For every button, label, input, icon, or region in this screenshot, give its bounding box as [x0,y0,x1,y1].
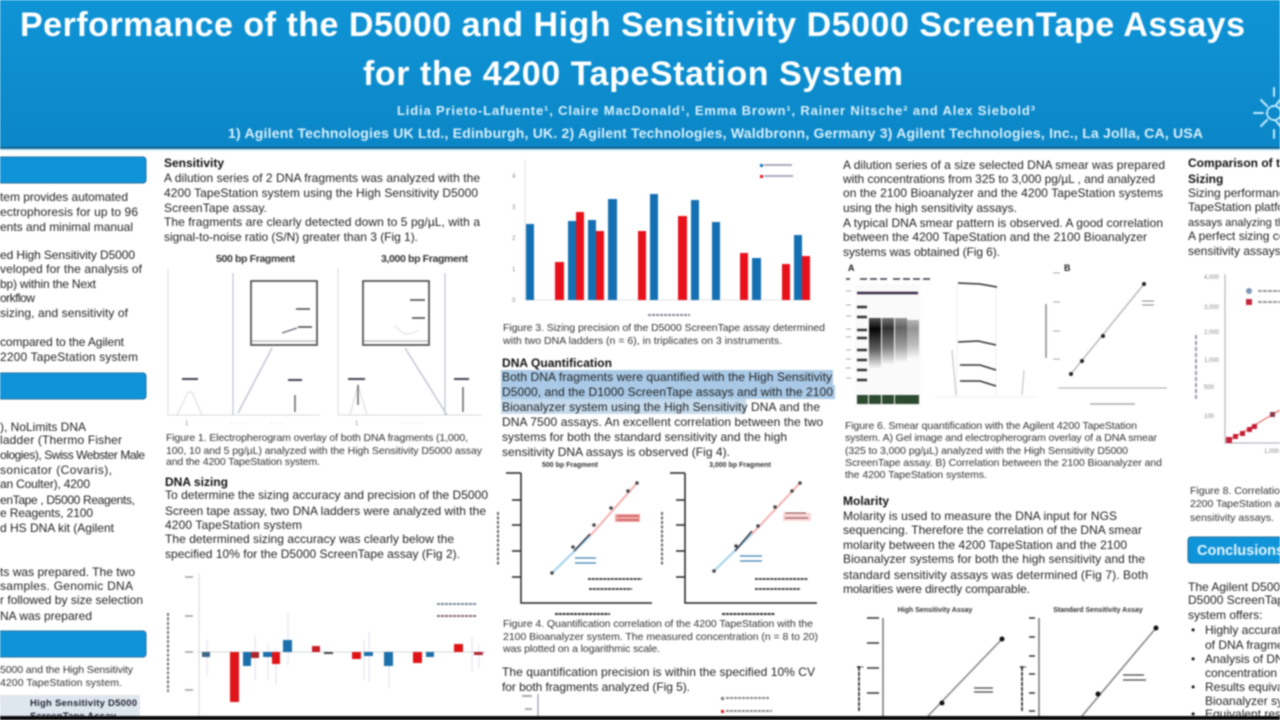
sensitivity text: A dilution series of 2 DNA fragments was analyzed with the [164,171,480,185]
figure 8: sizing correlation plot: 100 [1204,414,1215,420]
introduction text [0,190,143,364]
figure 1: electropherograms: 1 [355,421,359,427]
figure 4: correlation plots: 3,000 bp Fragment [709,462,772,469]
axis label [648,314,690,316]
figure 4: correlation plots [498,462,817,614]
figure 1: electropherograms: 1 [185,421,189,427]
figure 6 caption: system. A) Gel image and electropherogram overlay of a DNA smear [845,432,1158,444]
figure 4 caption: 2100 Bioanalyzer system. The measured concentration (n = 8 to 20) [503,631,818,643]
sensitivity text: ScreenTape assay. [164,201,267,215]
figure 8: sizing correlation plot: 500 [1204,385,1215,391]
figure 1 caption: and the 4200 TapeStation system. [166,456,320,468]
introduction text: bp) within the Next [0,277,97,291]
figure 6A: gel image: A [848,263,855,273]
figure 4 caption [502,618,818,655]
figure 3 caption: Figure 3. Sizing precision of the D5000 ScreenTape assay determined [503,322,825,334]
results intro text: 5000 and the High Sensitivity [0,664,134,676]
figure 8: sizing correlation plot: 4,000 [1204,275,1220,281]
molarity text: standard sensitivity assays was determined (Fig 7). Both [843,568,1148,582]
panel: introduction heading [0,157,146,183]
methods text: enTape , D5000 Reagents, [0,493,135,507]
bottom edge bar [0,716,1280,720]
molarity text: sequencing. Therefore the correlation of the DNA smear [843,523,1142,537]
conclusions text [1188,580,1280,720]
figure 7: molarity plots [857,607,1158,720]
heading: DNA Quantification: DNA Quantification [502,356,612,370]
figure 1 caption [166,432,483,468]
figure 8 caption: sensitivity assays. [1190,512,1274,524]
title [20,6,1245,93]
panel: methods heading [0,373,146,399]
figure 6 caption: ScreenTape assay. B) Correlation between the 2100 Bioanalyzer and [845,457,1162,469]
figure 3: sizing precision bar chart: 1 [512,267,516,273]
results intro text [0,664,134,689]
figure 3: sizing precision bar chart: 0 [512,298,516,304]
smear text: with concentrations from 325 to 3,000 pg/µL , and analyzed [842,172,1155,186]
figure 1: electropherograms: · · · · · · · [400,421,424,427]
column 2: sensitivity and sizing [164,156,488,716]
figure 3 caption: with two DNA ladders (n = 6), in triplicates on 3 instruments. [502,335,782,347]
figure 6B: correlation plot [1046,263,1167,404]
figure 1: electropherograms: · · · · [270,421,283,427]
smear text: on the 2100 Bioanalyzer and the 4200 TapeStation systems [843,186,1163,200]
sensitivity text: signal-to-noise ratio (S/N) greater than 3 (Fig 1). [164,230,418,244]
figure 6A: electropherogram overlay [935,283,1036,397]
introduction text: 2200 TapeStation system [0,350,138,364]
figure 6B: correlation plot: B [1064,263,1071,273]
figure 6A: gel image [846,263,932,406]
comparison text [1188,186,1280,258]
smear text: A typical DNA smear pattern is observed. A good correlation [843,216,1163,230]
methods text: samples. Genomic DNA [0,579,133,593]
panel: conclusions heading [1188,537,1280,563]
precision text: The quantification precision is within the specified 10% CV [502,665,815,679]
figure 6 caption: (325 to 3,000 pg/µL) analyzed with the High Sensitivity D5000 [845,445,1128,457]
DNA sizing text: To determine the sizing accuracy and precision of the D5000 [165,488,488,502]
quantification text: Bioanalyzer system using the High Sensitivity DNA and the [502,400,820,414]
methods text: d HS DNA kit (Agilent [0,521,115,535]
quantification text: D5000, and the D1000 ScreenTape assays and with the 2100 [502,385,833,399]
column 5: comparison and conclusions [1188,156,1280,720]
figure 8: sizing correlation plot: 1,000 [1204,358,1220,364]
figure 8: sizing correlation plot: 3,000 [1204,305,1220,311]
quantification text: sensitivity DNA assays is observed (Fig 4). [502,445,730,459]
table header [0,695,140,720]
heading: Sensitivity: Sensitivity [164,156,224,170]
DNA sizing text: Screen tape assay, two DNA ladders were analyzed with the [165,504,486,518]
DNA sizing text [165,488,488,561]
introduction text: compared to the Agilent [0,335,125,349]
introduction text: ed High Sensitivity D5000 [0,248,135,262]
figure 6 caption: Figure 6. Smear quantification with the Agilent 4200 TapeStation [845,420,1137,432]
methods text: e Reagents, 2100 [0,506,93,520]
legend [1246,288,1280,305]
title: Performance of the D5000 and High Sensitivity D5000 ScreenTape Assays [20,6,1245,44]
icon: Agilent spark logo [1254,88,1280,138]
title: for the 4200 TapeStation System [363,55,903,93]
results intro text: 4200 TapeStation system. [0,677,122,689]
molarity text: Bioanalyzer systems for both the high sensitivity and the [843,552,1145,566]
figure 8: sizing correlation plot: 1,000 [1264,449,1280,455]
quantification text: DNA 7500 assays. An excellent correlation between the two [502,415,823,429]
heading: comparison of sizing [1188,156,1280,186]
methods text: ladder (Thermo Fisher [0,433,122,447]
text selection highlight [501,370,835,414]
conclusions text: • [1191,680,1195,694]
methods text: sonicator (Covaris), [0,463,112,477]
column 4: smear and molarity [842,158,1167,720]
methods text: r followed by size selection [0,593,143,607]
methods text: ts was prepared. The two [0,565,135,579]
methods text: NA was prepared [0,609,92,623]
smear text: systems was obtained (Fig 6). [843,245,1000,259]
sensitivity text [164,171,480,244]
quantification text: Both DNA fragments were quantified with the High Sensitivity [502,370,832,384]
figure 7: molarity plots: High Sensitivity Assay [898,607,973,614]
figure 3 caption [502,322,825,347]
molarity text: Molarity is used to measure the DNA input for NGS [843,509,1117,523]
conclusions text: • [1191,623,1195,637]
methods text [0,420,145,623]
smear text [842,158,1165,259]
heading: DNA sizing: DNA sizing [165,475,228,489]
figure 4 caption: was plotted on a logarithmic scale. [502,643,660,655]
figure 5: precision chart (cropped) [522,694,772,720]
quantification text [502,370,833,459]
column 1: introduction and methods [0,157,146,720]
precision text [502,665,815,694]
header banner [0,0,1280,151]
molarity text: molarity between the 4200 TapeStation and the 2100 [843,538,1127,552]
table header: High Sensitivity D5000 [30,698,137,709]
introduction text: sizing, and sensitivity of [0,306,129,320]
methods text: an Coulter), 4200 [0,477,90,491]
column 3: precision and quantification [498,160,835,720]
smear text: A dilution series of a size selected DNA smear was prepared [843,158,1165,172]
conclusions text: • [1191,652,1195,666]
heading: comparison of sizing: Sizing [1188,172,1223,186]
figure 3: sizing precision bar chart: 3 [512,205,516,211]
figure 1: electropherograms [168,253,482,427]
panel: results heading [0,631,146,657]
DNA sizing text: 4200 TapeStation system [165,518,302,532]
molarity text [843,509,1148,596]
figure 1 caption: 100, 10 and 5 pg/µL) analyzed with the High Sensitivity D5000 assay [166,445,483,457]
figure 7: molarity plots: Standard Sensitivity Assay [1053,607,1143,614]
conclusions text: system offers: [1188,608,1262,622]
figure 2: sizing accuracy bar chart [168,573,486,716]
methods text: ologies), Swiss Webster Male [0,448,145,462]
precision text: for both fragments analyzed (Fig 5). [502,680,690,694]
legend [437,604,476,616]
introduction text: orkflow [0,291,35,305]
introduction text: tem provides automated [0,190,128,204]
introduction text: ectrophoresis for up to 96 [0,205,138,219]
figure 3: sizing precision bar chart [512,160,812,315]
authors: Lidia Prieto-Lafuente¹, Claire MacDonald¹, Emma Brown¹, Rainer Nitsche² and Alex Siebold³ [397,103,1036,118]
figure 6 caption: the 4200 TapeStation systems. [845,469,987,481]
heading: Molarity: Molarity [843,494,889,508]
molarity text: molarities were directly comparable. [843,582,1030,596]
sensitivity text: The fragments are clearly detected down to 5 pg/µL, with a [164,215,480,229]
sensitivity text: 4200 TapeStation system using the High Sensitivity D5000 [164,186,478,200]
figure 8: sizing correlation plot: 2,000 [1204,330,1220,336]
methods text: ), NoLimits DNA [0,420,86,434]
figure 6 caption [845,420,1162,481]
smear text: using the high sensitivity assays. [843,201,1017,215]
figure 8: sizing correlation plot [1196,274,1280,455]
figure 3: sizing precision bar chart: 2 [512,236,516,242]
DNA sizing text: specified 10% for the D5000 ScreenTape assay (Fig 2). [165,547,460,561]
figure 1: electropherograms: · · · · · [230,421,247,427]
figure 1: electropherograms: 3,000 bp Fragment [381,253,468,265]
conclusions text: concentration [1205,666,1277,680]
quantification text: systems for both the standard sensitivity and the high [502,430,787,444]
affiliations: 1) Agilent Technologies UK Ltd., Edinburgh, UK. 2) Agilent Technologies, Waldbronn, Germany 3) Agilent Technologies, Inc., La Jolla, CA, USA [228,125,1203,141]
smear text: between the 4200 TapeStation and the 2100 Bioanalyzer [843,230,1147,244]
legend [760,164,793,178]
DNA sizing text: The determined sizing accuracy was clearly below the [165,532,454,546]
figure 3: sizing precision bar chart: 4 [512,174,516,180]
figure 1 caption: Figure 1. Electropherogram overlay of both DNA fragments (1,000, [166,432,468,444]
introduction text: ents and minimal manual [0,220,133,234]
figure 8 caption [1190,485,1280,524]
figure 4: correlation plots: 500 bp Fragment [542,462,599,469]
figure 1: electropherograms: 500 bp Fragment [216,253,296,265]
figure 4 caption: Figure 4. Quantification correlation of the 4200 TapeStation with the [503,618,813,630]
introduction text: veloped for the analysis of [0,262,143,276]
